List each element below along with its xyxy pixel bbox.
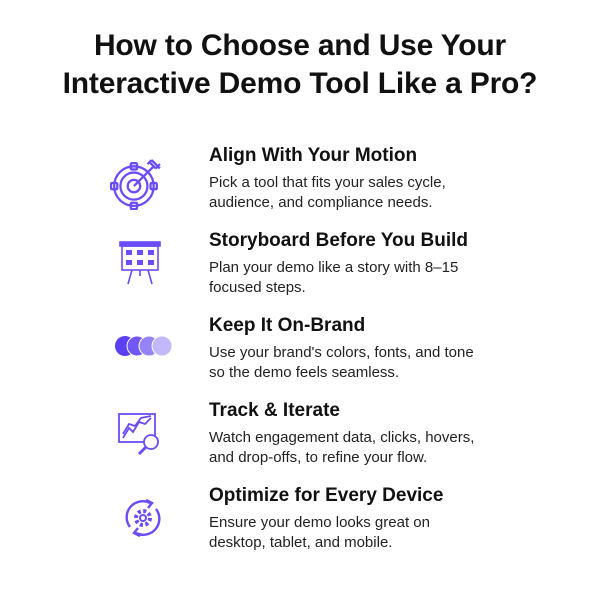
icon: analytics chart <box>118 413 159 455</box>
icon: brand colour circles <box>115 336 172 356</box>
item 5 <box>209 485 443 551</box>
item 3: Keep It On-Brand <box>209 315 365 336</box>
icon: storyboard <box>119 241 161 284</box>
item 2 <box>209 230 468 296</box>
item 1: Pick a tool that fits your sales cycle, <box>209 174 446 191</box>
title: How to Choose and Use Your <box>94 29 506 62</box>
title: Interactive Demo Tool Like a Pro? <box>63 67 537 100</box>
icon: target <box>110 159 161 210</box>
item 1: Align With Your Motion <box>209 145 417 166</box>
item 2: focused steps. <box>209 279 306 296</box>
title <box>63 29 537 100</box>
item 3: Use your brand's colors, fonts, and tone <box>209 344 474 361</box>
item 2: Plan your demo like a story with 8–15 <box>209 259 458 276</box>
item 3: so the demo feels seamless. <box>209 364 399 381</box>
item 4: and drop-offs, to refine your flow. <box>209 449 427 466</box>
item 5: Ensure your demo looks great on <box>209 514 430 531</box>
item 2: Storyboard Before You Build <box>209 230 468 251</box>
icon: gear sync <box>125 498 160 538</box>
item 4 <box>209 400 474 466</box>
item 1 <box>209 145 446 211</box>
item 4: Watch engagement data, clicks, hovers, <box>209 429 474 446</box>
item 1: audience, and compliance needs. <box>209 194 432 211</box>
item 5: desktop, tablet, and mobile. <box>209 534 392 551</box>
item 4: Track & Iterate <box>209 400 340 421</box>
item 5: Optimize for Every Device <box>209 485 443 506</box>
item 3 <box>209 315 474 381</box>
